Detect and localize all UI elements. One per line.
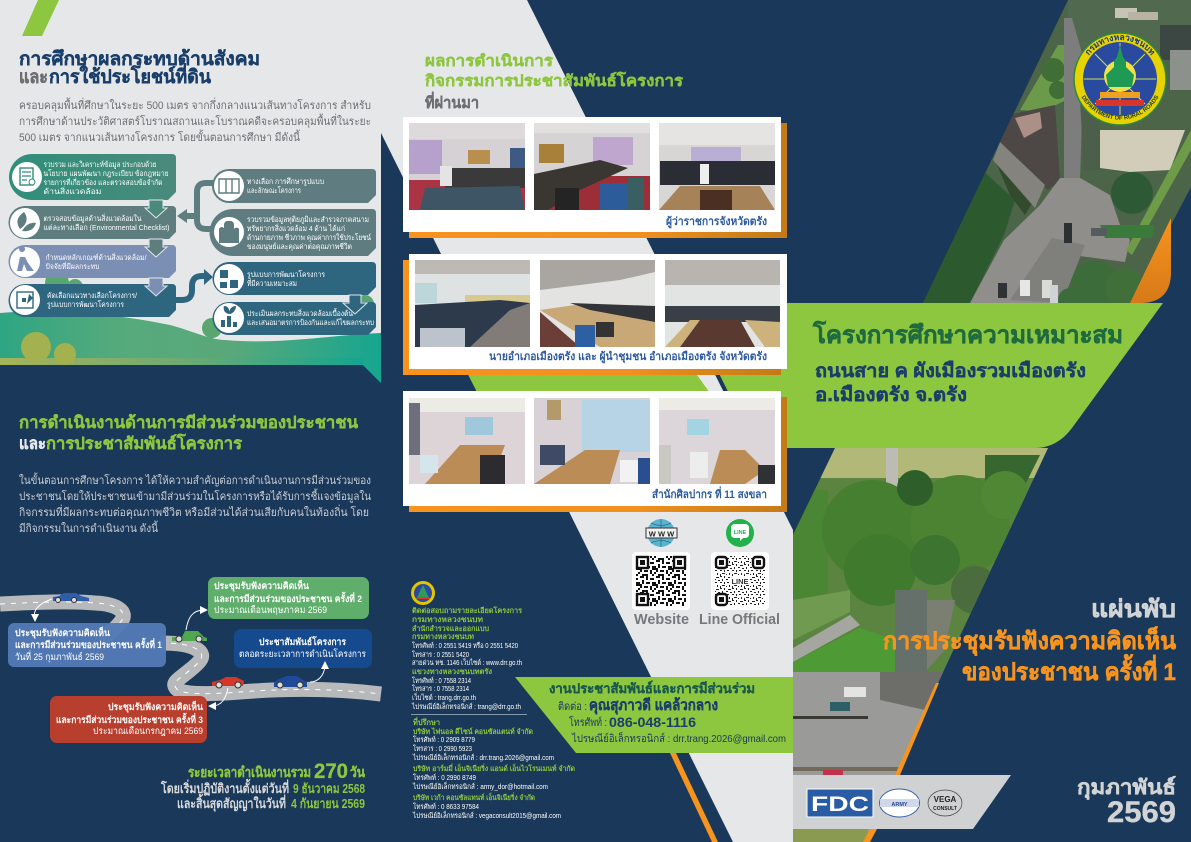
text block: DRR contacts: กรมทางหลวงชนบท <box>412 615 483 624</box>
logo: VEGA: CONSULT <box>933 806 957 812</box>
text block: participation paragraph: ประชาชนโดยให้ประชาชนเข้ามามีส่วนร่วมในโครงการหรือได้รับการชี้แจงข้อมูลใน <box>19 488 371 503</box>
photo: office C3 <box>659 398 775 484</box>
panel: photo frame 1 <box>403 117 787 238</box>
step: design options <box>212 169 376 203</box>
text block: duration: โดยเริ่มปฏิบัติงานตั้งแต่วันที่ <box>160 778 289 797</box>
panel: contact public relations: คุณสุภาวดี แคล้วกลาง <box>589 697 718 715</box>
step: suitable development pattern: รูปแบบการพัฒนาโครงการ <box>247 270 325 279</box>
panel: photo frame 3 <box>403 391 787 512</box>
text block: DRR contacts: ไปรษณีย์อิเล็กทรอนิกส์ : trang@drr.go.th <box>411 701 521 711</box>
callout: meeting 1 <box>8 623 166 667</box>
text block: consultants: โทรศัพท์ : 0 2909 8779 <box>413 735 475 744</box>
callout: meeting 2: และการมีส่วนร่วมของประชาชน ครั้งที่ 2 <box>214 591 362 605</box>
photo: office C2 <box>534 398 650 484</box>
text block: study scope paragraph: การศึกษาด้านประวัติศาสตร์โบราณสถานและโบราณคดีจะครอบคลุมพื้นที่ในระยะ <box>19 113 371 128</box>
heading: public participation: การดำเนินงานด้านการมีส่วนร่วมของประชาชน <box>19 413 359 432</box>
icon: line app: LINE <box>734 530 747 536</box>
step: secondary data and survey: รวบรวมข้อมูลทุติยภูมิและสำรวจภาคสนาม <box>247 215 369 224</box>
icon: green pickup <box>172 631 207 642</box>
text block: DRR contacts: โทรสาร : 0 7558 2314 <box>412 684 469 693</box>
text block: study scope paragraph: ครอบคลุมพื้นที่ศึกษาในระยะ 500 เมตร จากกึ่งกลางแนวเส้นทางโครงการ สำหรับ <box>19 97 371 112</box>
step: suitable development pattern: ที่มีความเหมาะสม <box>247 278 297 288</box>
arrow: step R3 to R4 <box>343 295 367 314</box>
callout: meeting 3: ประมาณเดือนกรกฎาคม 2569 <box>93 726 203 737</box>
photo: meeting room B1 <box>415 260 530 347</box>
heading: activities: ผลการดำเนินการ <box>425 52 554 70</box>
heading: public participation: การประชาสัมพันธ์โครงการ <box>46 433 242 453</box>
panel: left grey top panel <box>0 0 381 365</box>
label: website: Website <box>634 612 689 628</box>
callout: meeting 3: ประชุมรับฟังความคิดเห็น <box>108 700 203 713</box>
text block: participation paragraph: มีกิจกรรมในการดำเนินงาน ดังนี้ <box>19 520 159 535</box>
text block: duration: ระยะเวลาดำเนินงานรวม <box>188 764 311 780</box>
caption: fine arts office: สำนักศิลปากร ที่ 11 สงขลา <box>652 486 767 501</box>
step: collect and analyse: ด้านสิ่งแวดล้อม <box>44 186 102 196</box>
step: environmental checklist: แต่ละทางเลือก (Environmental Checklist) <box>44 223 170 232</box>
logo: VEGA: VEGA <box>934 795 957 804</box>
callout: meeting 2 <box>208 577 369 619</box>
text block: date <box>1077 776 1176 829</box>
callout: meeting 3 <box>50 696 207 743</box>
icon: red car <box>212 677 244 688</box>
step: collect and analyse: รายการที่เกี่ยวข้อง และตรวจสอบข้อจำกัด <box>44 177 163 187</box>
icon: small DRR logo <box>411 581 435 605</box>
step: environmental checklist: ตรวจสอบข้อมูลด้านสิ่งแวดล้อมใน <box>44 213 142 223</box>
logo: FDC: FDC <box>811 793 869 816</box>
text block: date: 2569 <box>1107 796 1176 829</box>
photo: meeting room B2 <box>540 260 655 347</box>
text block: duration: 270 <box>314 760 348 783</box>
step: secondary data and survey: ทรัพยากรสิ่งแวดล้อม 4 ด้าน ได้แก่ <box>247 223 345 233</box>
heading: social impact and land use: การใช้ประโยชน์ที่ดิน <box>49 63 211 88</box>
text block: DRR contacts <box>411 606 522 711</box>
text block: DRR contacts: แขวงทางหลวงชนบทตรัง <box>412 667 492 676</box>
panel: contact public relations: โทรศัพท์ : <box>569 715 607 729</box>
text block: date: กุมภาพันธ์ <box>1077 776 1176 800</box>
panel: logo bar <box>793 775 1011 829</box>
photo: group photo A3 <box>659 123 775 210</box>
emblem: Department of Rural Roads: กรมทางหลวงชนบท <box>1086 35 1154 56</box>
panel: contact public relations <box>515 677 793 753</box>
photo: office C1 <box>409 398 525 484</box>
callout: publicity <box>234 629 372 668</box>
QR code: website <box>632 552 690 610</box>
step: collect and analyse: รวบรวม และวิเคราะห์ข้อมูล ประกอบด้วย <box>44 160 156 169</box>
text block: duration: 4 กันยายน 2569 <box>291 796 365 811</box>
callout: meeting 1: ประชุมรับฟังความคิดเห็น <box>15 626 110 639</box>
arrow: orange stripe bottom <box>863 829 877 842</box>
text block: consultants: บริษัท อาร์มมี่ เอ็นจิเนียริ่ง แอนด์ เอ็นไวโรนเมนท์ จำกัด <box>413 763 575 773</box>
callout: meeting 3: และการมีส่วนร่วมของประชาชน ครั้งที่ 3 <box>56 712 203 726</box>
heading: activities <box>425 52 684 112</box>
text block: cover title <box>883 596 1177 686</box>
panel: middle diagonal grey band <box>381 0 793 842</box>
arrow: right bracket connector <box>186 183 214 229</box>
heading: activities: ที่ผ่านมา <box>425 91 479 112</box>
shape: orange corner accent <box>1130 218 1171 303</box>
caption: governor: ผู้ว่าราชการจังหวัดตรัง <box>666 215 767 229</box>
text block: DRR contacts: สำนักสำรวจและออกแบบ <box>412 624 489 633</box>
step: criteria <box>8 245 176 278</box>
panel: photo frame 2 <box>403 254 787 375</box>
caption: district chief and community leaders: นายอำเภอเมืองตรัง และ ผู้นำชุมชน อำเภอเมืองตรัง จังหวัดตรัง <box>489 350 767 364</box>
text block: consultants: โทรศัพท์ : 0 8633 97584 <box>413 802 479 811</box>
step: secondary data and survey: ด้านกายภาพ ชีวภาพ คุณค่าการใช้ประโยชน์ <box>247 233 371 242</box>
callout: meeting 2: ประชุมรับฟังความคิดเห็น <box>214 579 309 592</box>
heading: public participation: และ <box>19 435 46 453</box>
flowchart: study process <box>8 154 376 335</box>
text block: participation paragraph <box>19 472 371 535</box>
icon: line app <box>726 519 754 547</box>
panel: green project banner <box>684 303 1163 448</box>
panel: contact public relations: ติดต่อ : <box>558 701 587 713</box>
text block: DRR contacts: โทรศัพท์ : 0 2551 5419 หรือ 0 2551 5420 <box>412 641 518 650</box>
panel: green project banner: ถนนสาย ค ผังเมืองรวมเมืองตรัง <box>815 360 1086 382</box>
icon: website globe <box>646 519 677 547</box>
text block: DRR contacts: สายด่วน ทช. 1146 เว็บไซต์ : www.drr.go.th <box>412 657 522 667</box>
step: select alternatives: คัดเลือกแนวทางเลือกโครงการ/ <box>47 291 138 300</box>
text block: duration: และสิ้นสุดสัญญาในวันที่ <box>177 793 286 812</box>
callout: meeting 1: และการมีส่วนร่วมของประชาชน ครั้งที่ 1 <box>15 637 163 651</box>
step: design options: และลักษณะโครงการ <box>247 186 301 195</box>
logo: ARMY: ARMY <box>891 802 908 808</box>
QR code: line official <box>711 552 769 610</box>
step: collect and analyse <box>9 154 176 200</box>
step: select alternatives <box>8 284 176 317</box>
emblem: Department of Rural Roads: DEPARTMENT OF RURAL ROADS <box>1082 95 1158 120</box>
icon: blue car top <box>53 593 89 602</box>
arrows: road callout pointers <box>31 599 329 710</box>
heading: social impact and land use <box>19 48 260 88</box>
step: select alternatives: รูปแบบการพัฒนาโครงการ <box>47 300 124 309</box>
illustration: winding road <box>0 602 381 694</box>
text block: duration: 9 ธันวาคม 2568 <box>293 781 365 796</box>
step: criteria: กำหนดหลักเกณฑ์ด้านสิ่งแวดล้อม/ <box>46 252 147 262</box>
text block: duration <box>160 760 365 812</box>
text block: consultants: ไปรษณีย์อิเล็กทรอนิกส์ : vegaconsult2015@gmail.com <box>412 810 561 820</box>
text block: participation paragraph: กิจกรรมที่มีผลกระทบต่อคุณภาพชีวิต หรือมีส่วนได้ส่วนเสียกับคนในท้องถิ่น โดย <box>19 504 369 519</box>
arrow: to right boxes <box>176 269 213 300</box>
text block: DRR contacts: โทรสาร : 0 2551 5420 <box>412 650 469 659</box>
step: criteria: ปัจจัยที่มีผลกระทบ <box>46 261 100 271</box>
illustration: hills and trees <box>0 271 381 383</box>
heading: activities: กิจกรรมการประชาสัมพันธ์โครงการ <box>425 71 684 90</box>
arrow: orange diagonal stripe cover <box>895 683 939 775</box>
photo: aerial bottom <box>790 448 1050 842</box>
text block: consultants: บริษัท เวก้า คอนซัลแทนท์ เอ็นจิเนียริ่ง จำกัด <box>413 792 535 802</box>
logo: ARMY <box>880 789 920 817</box>
callout: meeting 1: วันที่ 25 กุมภาพันธ์ 2569 <box>15 650 104 663</box>
text block: consultants <box>411 714 575 820</box>
panel: contact public relations: งานประชาสัมพันธ์และการมีส่วนร่วม <box>549 680 755 696</box>
step: preliminary impact assessment: ประเมินผลกระทบสิ่งแวดล้อมเบื้องต้น <box>247 308 353 318</box>
text block: participation paragraph: ในขั้นตอนการศึกษาโครงการ ได้ให้ความสำคัญต่อการดำเนินงานการมีส่วนร่วมของ <box>19 472 371 487</box>
photo: aerial top <box>920 0 1191 312</box>
panel: green band behind photo frames <box>430 300 715 400</box>
text block: consultants: โทรสาร : 0 2990 5923 <box>413 744 472 753</box>
icon: blue car right <box>274 676 307 688</box>
text block: DRR contacts: ติดต่อสอบถามรายละเอียดโครงการ <box>412 606 522 615</box>
text block: study scope paragraph: 500 เมตร จากแนวเส้นทางโครงการ โดยขั้นตอนการศึกษา มีดังนี้ <box>19 129 301 144</box>
heading: public participation <box>19 413 359 453</box>
text block: study scope paragraph <box>19 97 371 144</box>
emblem: Department of Rural Roads <box>1073 32 1167 126</box>
text block: consultants: ไปรษณีย์อิเล็กทรอนิกส์ : drr.trang.2026@gmail.com <box>412 752 554 762</box>
text block: consultants: บริษัท ไฟนอล ดีไซน์ คอนซัลแตนท์ จำกัด <box>413 727 533 736</box>
photo: meeting room A2 <box>534 123 650 210</box>
step: collect and analyse: นโยบาย แผนพัฒนา กฎระเบียบ ข้อกฎหมาย <box>44 169 168 178</box>
text block: cover title: แผ่นพับ <box>1091 596 1176 623</box>
text block: consultants: ไปรษณีย์อิเล็กทรอนิกส์ : army_dor@hotmail.com <box>412 781 548 791</box>
step: secondary data and survey: ของมนุษย์และคุณค่าต่อคุณภาพชีวิต <box>247 242 352 251</box>
logo: VEGA <box>928 790 962 816</box>
text block: DRR contacts: กรมทางหลวงชนบท <box>412 632 474 641</box>
icon: website globe: W W W <box>649 529 675 538</box>
text block: cover title: การประชุมรับฟังความคิดเห็น <box>883 626 1177 657</box>
panel: green project banner: อ.เมืองตรัง จ.ตรัง <box>815 384 967 406</box>
step: suitable development pattern <box>212 262 376 295</box>
callout: publicity: ตลอดระยะเวลาการดำเนินโครงการ <box>239 648 366 660</box>
step: environmental checklist <box>8 206 176 239</box>
logo: FDC <box>807 789 873 817</box>
callout: publicity: ประชาสัมพันธ์โครงการ <box>259 636 347 648</box>
text block: DRR contacts: โทรศัพท์ : 0 7558 2314 <box>412 676 471 685</box>
text block: consultants: โทรศัพท์ : 0 2990 8749 <box>413 773 476 782</box>
arrow: to step 2 <box>177 209 187 223</box>
text block: DRR contacts: เว็บไซต์ : trang.drr.go.th <box>412 692 476 702</box>
panel: contact public relations: 086-048-1116 <box>609 714 696 730</box>
arrow: orange diagonal stripe middle <box>670 753 718 842</box>
QR code: line official: LINE <box>731 577 749 586</box>
heading: social impact and land use: การศึกษาผลกระทบด้านสังคม <box>19 48 260 70</box>
text block: duration: วัน <box>350 764 365 780</box>
callout: meeting 2: ประมาณเดือนพฤษภาคม 2569 <box>214 605 327 616</box>
heading: social impact and land use: และ <box>19 67 48 88</box>
step: secondary data and survey <box>209 209 376 256</box>
photo: meeting room B3 <box>665 260 780 347</box>
label: line official: Line Official <box>699 612 780 628</box>
text block: consultants: ที่ปรึกษา <box>413 716 440 727</box>
panel: contact public relations: ไปรษณีย์อิเล็กทรอนิกส์ : drr.trang.2026@gmail.com <box>571 731 786 745</box>
step: design options: ทางเลือก การศึกษารูปแบบ <box>247 177 324 186</box>
step: preliminary impact assessment <box>212 302 376 335</box>
text block: cover title: ของประชาชน ครั้งที่ 1 <box>962 653 1176 686</box>
photo: meeting room A1 <box>409 123 525 210</box>
arrows: down arrows between steps <box>145 200 167 296</box>
panel: green project banner: โครงการศึกษาความเหมาะสม <box>812 320 1123 349</box>
step: preliminary impact assessment: และเสนอมาตรการป้องกันและแก้ไขผลกระทบ <box>247 318 374 327</box>
